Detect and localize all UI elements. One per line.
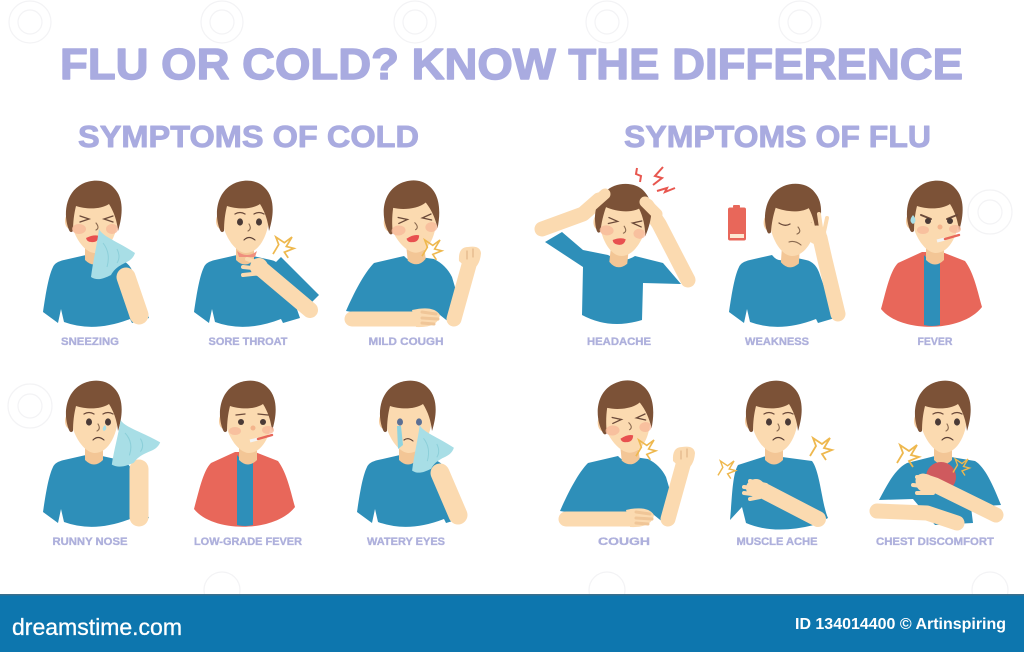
footer bar bbox=[0, 594, 1024, 652]
label: low-grade fever: LOW-GRADE FEVER bbox=[194, 536, 302, 548]
label: runny nose: RUNNY NOSE bbox=[52, 536, 128, 548]
label: sore throat: SORE THROAT bbox=[208, 336, 288, 348]
icon: red lightning bolts bbox=[636, 167, 675, 192]
label: watery eyes: WATERY EYES bbox=[367, 536, 445, 548]
label: headache: HEADACHE bbox=[587, 336, 651, 348]
icon: low battery bbox=[728, 205, 746, 240]
figure: low-grade fever bbox=[194, 381, 295, 527]
label: cough: COUGH bbox=[598, 536, 650, 548]
heading: symptoms of flu: SYMPTOMS OF FLU bbox=[624, 119, 931, 154]
label: mild cough: MILD COUGH bbox=[368, 336, 444, 348]
footer brand: dreamstime.com bbox=[12, 614, 182, 640]
label: chest discomfort: CHEST DISCOMFORT bbox=[876, 536, 994, 548]
label: weakness: WEAKNESS bbox=[745, 336, 809, 348]
figure: muscle ache bbox=[718, 381, 832, 530]
figure: sore throat bbox=[194, 181, 313, 327]
figure: chest discomfort bbox=[877, 381, 1001, 525]
figure: mild cough bbox=[346, 178, 481, 327]
figure: fever bbox=[881, 181, 982, 327]
figure: headache bbox=[542, 167, 688, 324]
label: fever: FEVER bbox=[918, 336, 953, 348]
figure: watery eyes bbox=[357, 381, 463, 527]
figure: cough bbox=[560, 378, 695, 527]
figure: runny nose bbox=[43, 381, 160, 527]
heading: symptoms of cold: SYMPTOMS OF COLD bbox=[78, 119, 419, 154]
title: FLU OR COLD? KNOW THE DIFFERENCE bbox=[60, 40, 963, 89]
label: sneezing: SNEEZING bbox=[61, 336, 119, 348]
figure: sneezing bbox=[43, 181, 149, 327]
label: muscle ache: MUSCLE ACHE bbox=[736, 536, 818, 548]
figure: weakness bbox=[729, 182, 838, 327]
footer image id and credit: ID 134014400 © Artinspiring bbox=[795, 616, 1006, 633]
